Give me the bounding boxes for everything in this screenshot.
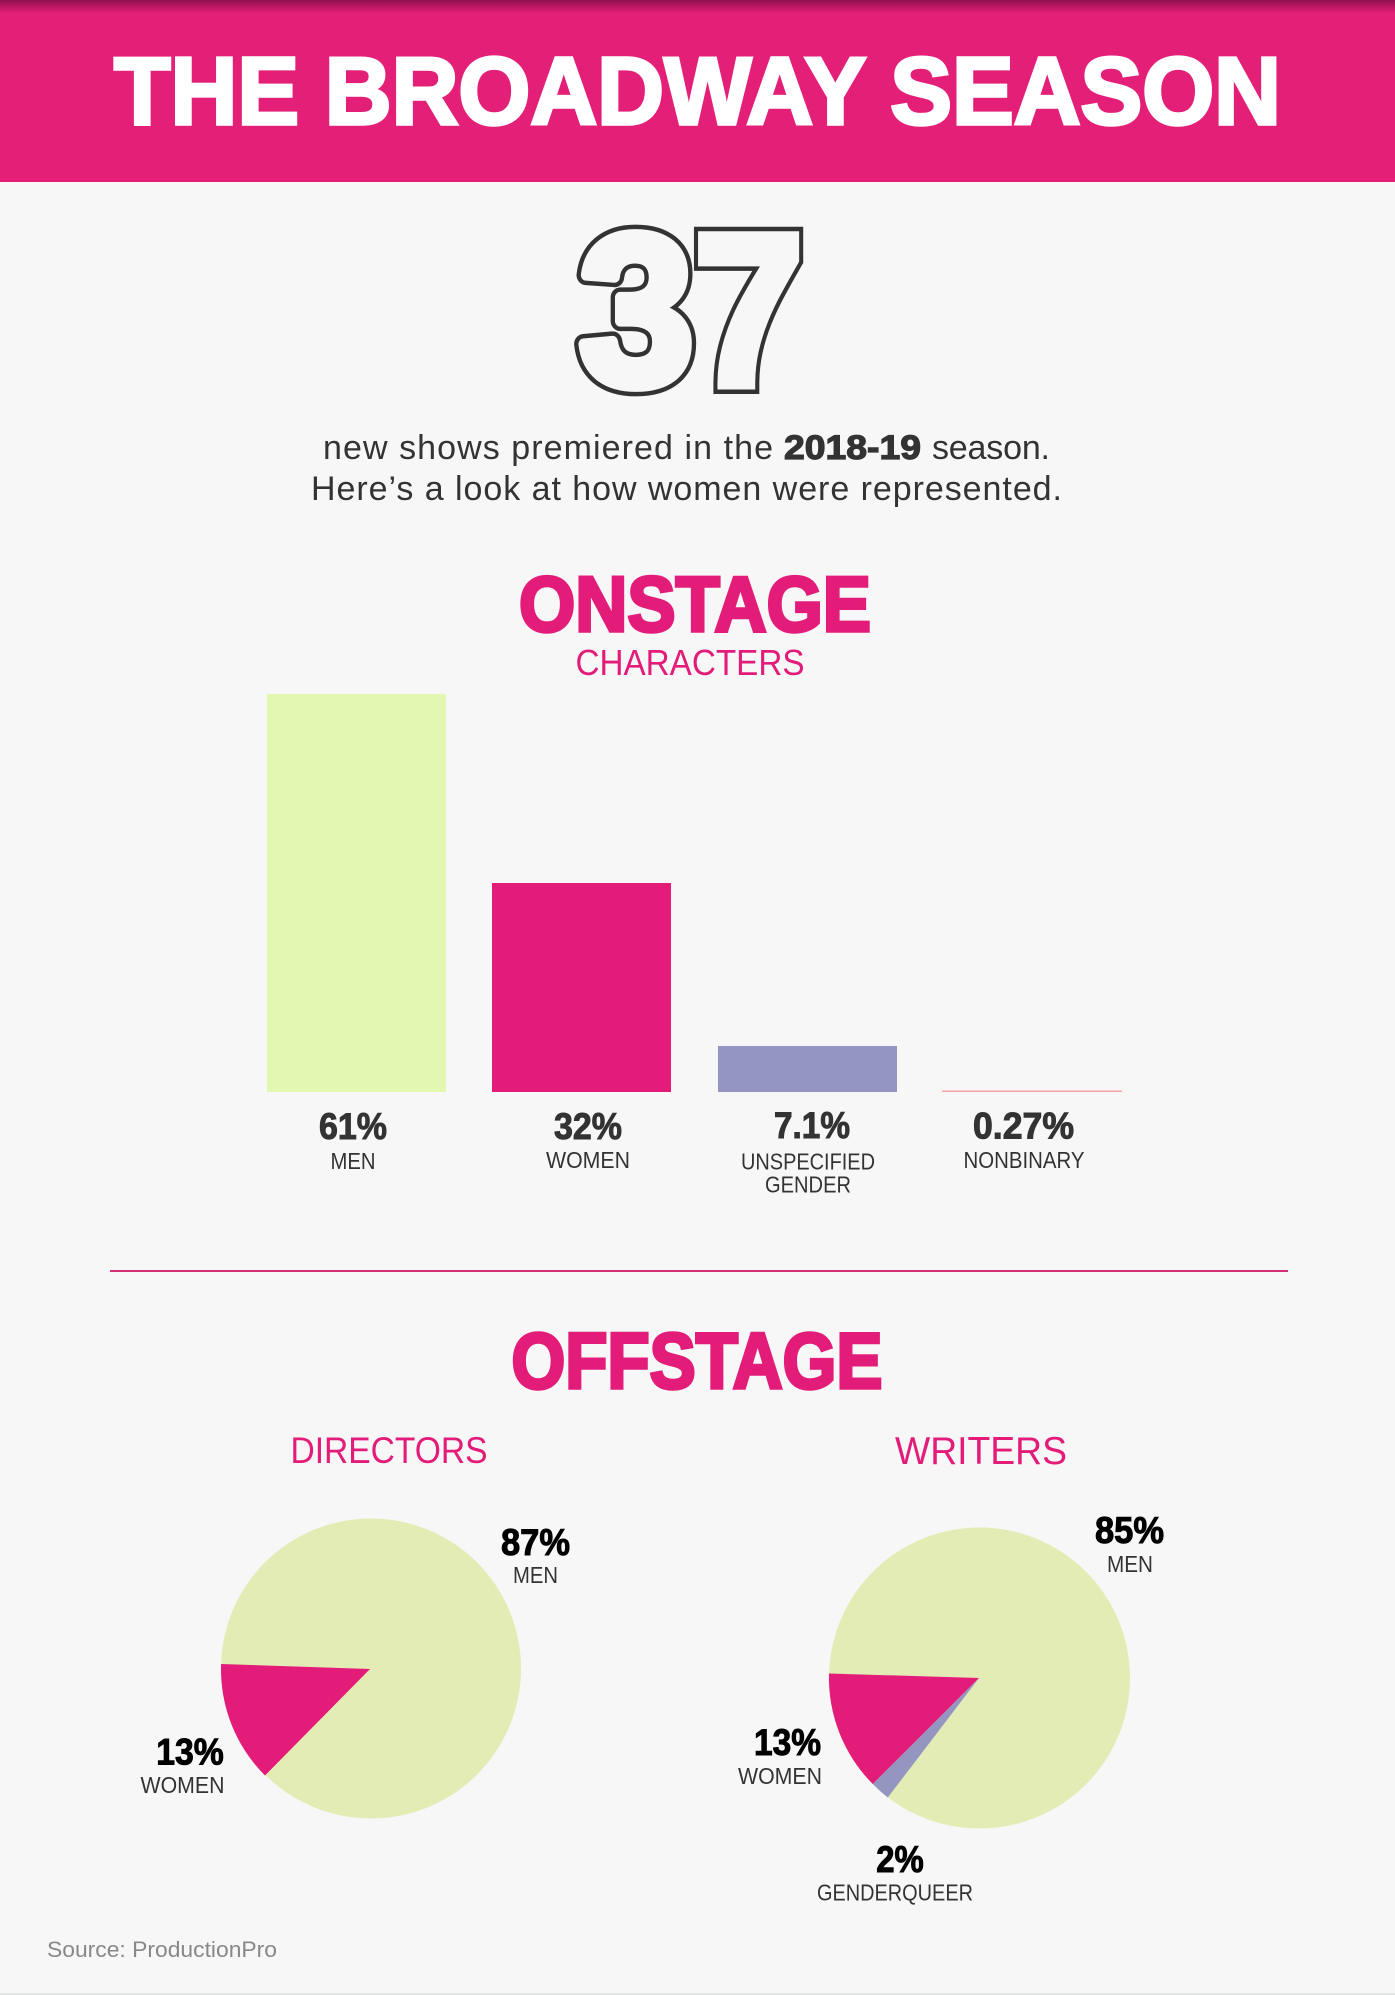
bar label: men: MEN (330, 1148, 376, 1174)
subheading: directors: DIRECTORS (290, 1430, 488, 1471)
intro text: season. (932, 429, 1050, 467)
heading: offstage: OFFSTAGE (512, 1316, 882, 1405)
pie label: writers men: MEN (1107, 1551, 1153, 1577)
pie label: directors women: WOMEN (140, 1772, 224, 1798)
pie label: writers genderqueer: 2% (876, 1839, 924, 1880)
bar label: unspecified gender: 7.1% (774, 1105, 850, 1146)
header banner (0, 0, 1395, 182)
intro text: 2018-19 (784, 429, 921, 467)
bar label: men (319, 1106, 387, 1174)
intro text: Here’s a look at how women were represented. (311, 470, 1062, 508)
pie label: directors women (140, 1732, 224, 1798)
bar: men (267, 694, 446, 1092)
bar label: women: 32% (554, 1106, 622, 1147)
pie label: writers women (738, 1722, 822, 1789)
bar label: men: 61% (319, 1106, 387, 1147)
bar label: nonbinary: NONBINARY (964, 1147, 1084, 1173)
subheading: characters: CHARACTERS (576, 642, 804, 683)
pie label: writers women: 13% (754, 1722, 821, 1763)
bar label: unspecified gender: UNSPECIFIED (741, 1148, 875, 1174)
bar: unspecified gender (718, 1046, 897, 1092)
big outlined number 37: 3 (579, 191, 694, 430)
pie chart: writers (829, 1528, 1130, 1828)
bar chart: onstage characters (267, 694, 1122, 1092)
big outlined number 37: 7 (695, 191, 803, 430)
intro text (311, 429, 1062, 508)
bar label: nonbinary (964, 1106, 1084, 1173)
pie label: writers men: 85% (1095, 1510, 1164, 1551)
bar label: nonbinary: 0.27% (973, 1106, 1074, 1146)
title: THE BROADWAY SEASON (114, 38, 1281, 145)
bar label: women (546, 1106, 630, 1173)
pie label: writers men (1095, 1510, 1164, 1577)
pie label: directors men: 87% (501, 1522, 570, 1563)
heading: onstage: ONSTAGE (519, 560, 871, 648)
bar label: unspecified gender (741, 1105, 875, 1198)
source note: Source: ProductionPro (47, 1937, 277, 1962)
slice: men (829, 1528, 1130, 1828)
big outlined number 37: 7 (695, 191, 803, 430)
bar label: unspecified gender: GENDER (765, 1172, 851, 1198)
bar label: women: WOMEN (546, 1147, 630, 1173)
pie chart: directors (221, 1518, 521, 1818)
pie label: writers women: WOMEN (738, 1763, 822, 1789)
slice: men (221, 1518, 521, 1818)
pie label: directors women: 13% (156, 1732, 224, 1772)
pie label: directors men: MEN (513, 1562, 558, 1588)
slice: genderqueer (873, 1678, 979, 1798)
subheading: writers: WRITERS (895, 1430, 1067, 1473)
pie label: writers genderqueer (817, 1839, 973, 1906)
slice: women (829, 1674, 979, 1784)
bar: nonbinary (942, 1090, 1122, 1092)
bar: women (492, 883, 671, 1092)
pie label: directors men (501, 1522, 570, 1588)
intro text: new shows premiered in the (323, 429, 773, 467)
big outlined number 37: 3 (579, 191, 694, 430)
slice: women (221, 1664, 370, 1776)
big outlined number 37 (579, 191, 803, 430)
pie label: writers genderqueer: GENDERQUEER (817, 1880, 973, 1906)
